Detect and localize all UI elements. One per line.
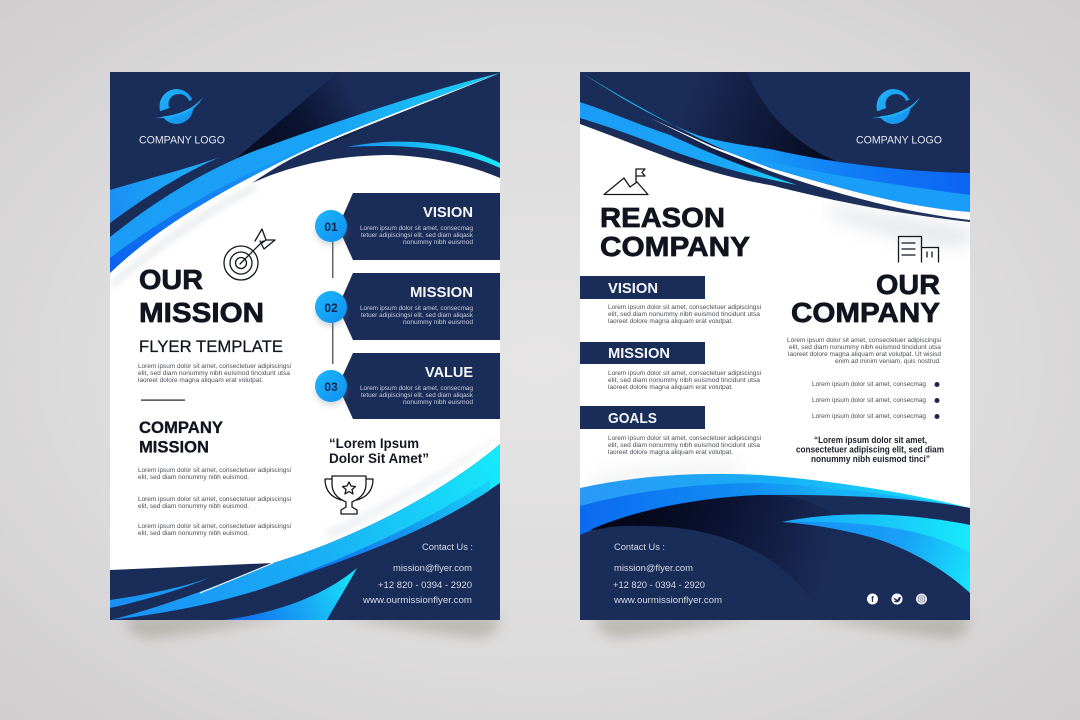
text block: our company: elit, sed diam nonummy nibh euismod tincidunt utsa <box>789 344 941 351</box>
bullet list: Lorem ipsum dolor sit amet, consecmag <box>812 381 926 388</box>
header dark wedge <box>236 79 358 159</box>
text block: company mission: Lorem ipsum dolor sit amet, consectetuer adipiscingsi <box>138 467 292 474</box>
logo cut <box>154 96 203 117</box>
panel: mission: Lorem ipsum dolor sit amet, consecmag <box>360 305 473 312</box>
heading: our company <box>791 269 940 328</box>
text block: mission <box>608 370 762 391</box>
quote right <box>796 435 944 465</box>
panel: vision <box>338 193 500 260</box>
panel: value: nonummy nibh euismod <box>403 399 473 406</box>
contact left: www.ourmissionflyer.com <box>362 595 472 606</box>
panel: mission: tetuer adipiscingsi elit, sed diam aliqask <box>361 312 474 319</box>
heading: reason company <box>600 202 750 262</box>
badge 03 <box>315 370 347 406</box>
text block: vision: elit, sed diam nonummy nibh euismod tincidunt utsa <box>608 311 760 318</box>
logo text: COMPANY LOGO <box>139 134 225 146</box>
heading: company mission <box>139 419 223 456</box>
lower light band <box>720 149 970 212</box>
footer circle <box>580 526 639 535</box>
panel: left flyer <box>110 72 500 620</box>
bar: vision <box>580 276 705 299</box>
text block: vision: Lorem ipsum dolor sit amet, consectetuer adipiscingsi <box>608 304 762 311</box>
contact right: Contact Us : <box>614 542 665 553</box>
flyer shadows <box>127 616 969 638</box>
logo left <box>139 89 225 146</box>
icon: facebook: f <box>871 595 874 604</box>
top shard <box>110 157 220 223</box>
top blue ribbon <box>580 72 970 212</box>
text block: company mission: Lorem ipsum dolor sit amet, consectetuer adipiscingsi <box>138 496 292 503</box>
heading: reason company: REASON <box>600 202 725 233</box>
ribbon shadow <box>110 183 258 288</box>
bottom blade <box>225 568 357 620</box>
heading: our mission: MISSION <box>139 297 264 328</box>
quote left <box>329 436 429 466</box>
bottom navy <box>110 444 500 620</box>
left blue streak <box>580 102 797 185</box>
panel: vision: tetuer adipiscingsi elit, sed diam aliqask <box>361 232 474 239</box>
quote left: Dolor Sit Amet” <box>329 451 429 466</box>
wave shadow <box>603 466 728 483</box>
text block: vision: laoreet dolore magna aliquam erat volutpat. <box>608 318 733 325</box>
text block: company mission: Lorem ipsum dolor sit amet, consectetuer adipiscingsi <box>138 523 292 530</box>
bottom ribbon shadow <box>328 456 468 537</box>
logo right <box>856 89 942 146</box>
icon: mountain flag <box>604 169 648 194</box>
logo ring <box>876 89 910 124</box>
bar: vision: VISION <box>608 280 658 297</box>
bullet list: Lorem ipsum dolor sit amet, consecmag <box>812 413 926 420</box>
royal wave <box>580 483 970 535</box>
panel: value: tetuer adipiscingsi elit, sed diam aliqask <box>361 392 474 399</box>
panel: mission <box>338 273 500 340</box>
text block: mission: Lorem ipsum dolor sit amet, consectetuer adipiscingsi <box>608 370 762 377</box>
white body <box>110 73 500 620</box>
heading: our mission <box>139 264 264 328</box>
logo cut <box>871 96 920 117</box>
light wave <box>580 474 970 508</box>
text block: company mission: elit, sed diam nonummy nibh euismod. <box>138 474 249 481</box>
text block: goals: Lorem ipsum dolor sit amet, consectetuer adipiscingsi <box>608 435 762 442</box>
panel: mission: MISSION <box>410 284 473 301</box>
heading: our company: OUR <box>876 269 940 300</box>
panel: mission: nonummy nibh euismod <box>403 319 473 326</box>
text block: vision <box>608 304 762 325</box>
text block: intro: laoreet dolore magna aliquam erat volutpat. <box>138 377 263 384</box>
blade top band <box>782 514 970 553</box>
logo ring <box>160 89 194 124</box>
text block: our company: laoreet dolore magna aliquam erat volutpat. Ut wisisd <box>788 351 941 358</box>
badge 03: 03 <box>324 380 338 394</box>
heading: company mission: MISSION <box>139 438 209 456</box>
cyan arc <box>347 142 500 168</box>
icon: trophy <box>325 476 373 514</box>
footer waves right <box>580 466 970 620</box>
logo text: COMPANY LOGO <box>856 134 942 146</box>
flyer base <box>580 72 970 222</box>
contact left <box>362 542 473 606</box>
contact left: mission@flyer.com <box>393 563 472 574</box>
panel: value: Lorem ipsum dolor sit amet, consecmag <box>360 385 473 392</box>
heading: company mission: COMPANY <box>139 419 223 437</box>
panel: right flyer <box>580 72 970 508</box>
panel: value: VALUE <box>425 364 473 381</box>
logo swoosh <box>872 97 920 118</box>
icon: target <box>224 229 275 280</box>
cyan streak <box>110 578 209 608</box>
contact right <box>613 542 722 606</box>
subheading: flyer template: FLYER TEMPLATE <box>139 338 283 356</box>
bar: mission: MISSION <box>608 345 670 362</box>
footer dark area <box>590 495 820 582</box>
badge 01: 01 <box>324 220 338 234</box>
text block: intro: Lorem ipsum dolor sit amet, consectetuer adipiscingsi <box>138 363 292 370</box>
panel: vision: nonummy nibh euismod <box>403 239 473 246</box>
bar: goals: GOALS <box>608 410 657 427</box>
bar: mission <box>580 342 705 364</box>
text block: intro: elit, sed diam nonummy nibh euismod tincidunt utsa <box>138 370 290 377</box>
contact right: +12 820 - 0394 - 2920 <box>613 580 705 591</box>
icon: building <box>898 236 938 262</box>
text block: intro <box>138 363 292 384</box>
text block: mission: elit, sed diam nonummy nibh euismod tincidunt utsa <box>608 377 760 384</box>
bullet list <box>812 381 940 420</box>
cyan ribbon <box>110 444 500 620</box>
quote right: “Lorem ipsum dolor sit amet, <box>814 435 927 446</box>
text block: goals: elit, sed diam nonummy nibh euismod tincidunt utsa <box>608 442 760 449</box>
text block: our company: Lorem ipsum dolor sit amet, consectetuer adipiscingsi <box>787 337 942 344</box>
text block: company mission <box>138 467 292 537</box>
main blue ribbon <box>110 73 500 273</box>
contact right: mission@flyer.com <box>614 563 693 574</box>
panel: vision: VISION <box>423 204 473 221</box>
white streak <box>200 563 273 593</box>
text block: mission: laoreet dolore magna aliquam erat volutpat. <box>608 384 733 391</box>
badge 02 <box>315 291 347 327</box>
bar: goals <box>580 406 705 429</box>
badge 01 <box>315 210 347 246</box>
badge 02: 02 <box>324 301 338 315</box>
flyer base <box>110 72 500 273</box>
panel: vision: Lorem ipsum dolor sit amet, consecmag <box>360 225 473 232</box>
royal band <box>110 143 320 273</box>
navy footer <box>580 495 970 620</box>
heading: reason company: COMPANY <box>600 231 750 262</box>
text block: company mission: elit, sed diam nonummy nibh euismod. <box>138 530 249 537</box>
curve shadow <box>830 205 970 245</box>
heading: our mission: OUR <box>139 264 203 295</box>
text block: our company: enim ad minim veniam, quis nostrud. <box>835 358 941 365</box>
mid ribbon band <box>287 480 490 580</box>
white body <box>580 124 970 508</box>
header dark wedge <box>683 72 838 169</box>
contact left: Contact Us : <box>422 542 473 553</box>
bullet list: Lorem ipsum dolor sit amet, consecmag <box>812 397 926 404</box>
quote right: consectetuer adipiscing elit, sed diam <box>796 444 944 456</box>
icon: twitter <box>892 594 902 604</box>
contact left: +12 820 - 0394 - 2920 <box>378 580 472 591</box>
text block: our company <box>787 337 942 365</box>
quote left: “Lorem Ipsum <box>329 436 419 451</box>
heading: our company: COMPANY <box>791 297 940 328</box>
social icons <box>867 594 927 604</box>
white streak <box>650 118 970 220</box>
cyan blade <box>782 514 970 593</box>
timeline connectors <box>332 236 334 364</box>
logo swoosh <box>155 97 203 118</box>
contact right: www.ourmissionflyer.com <box>613 595 722 606</box>
icon: instagram <box>916 594 927 604</box>
text block: goals: laoreet dolore magna aliquam erat volutpat. <box>608 449 733 456</box>
text block: company mission: elit, sed diam nonummy nibh euismod. <box>138 503 249 510</box>
panel: value <box>338 353 500 419</box>
text block: goals <box>608 435 762 456</box>
quote right: nonummy nibh euismod tinci” <box>811 454 930 465</box>
